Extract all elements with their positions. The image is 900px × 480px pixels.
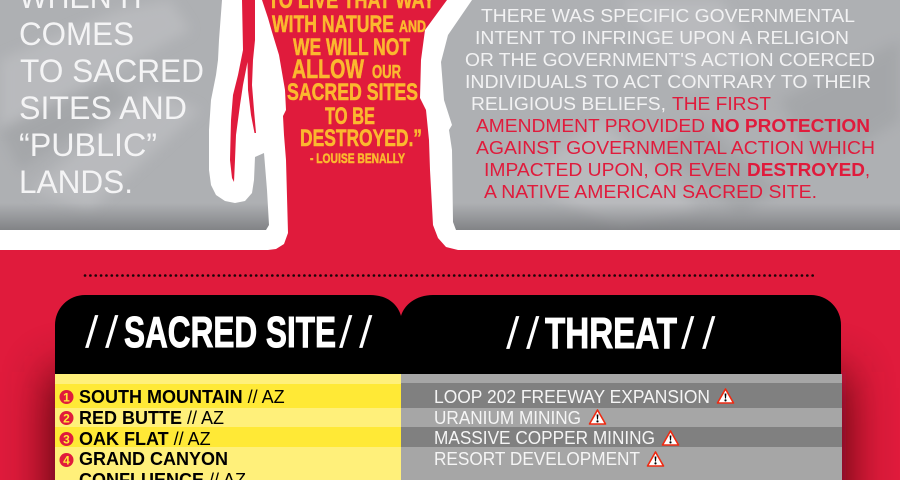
- heading: when it comes to sacred sites and public lands: “PUBLIC”: [19, 127, 157, 163]
- heading: threat: /: [679, 309, 696, 358]
- panel: gray background: [0, 0, 900, 230]
- header: black tabs: [55, 295, 841, 374]
- quote: Louise Benally: - LOUISE BENALLY: [310, 150, 405, 166]
- heading: threat: /: [700, 309, 717, 358]
- row 1 site: SOUTH MOUNTAIN // AZ: [79, 387, 285, 407]
- column: sacred site rows: [55, 374, 401, 480]
- heading: sacred site: /: [337, 308, 354, 357]
- quote: Louise Benally: WE WILL NOT: [293, 34, 410, 61]
- quote: Louise Benally: [268, 0, 435, 166]
- heading: when it comes to sacred sites and public lands: LANDS.: [19, 164, 133, 200]
- row 3 threat: MASSIVE COPPER MINING: [434, 428, 655, 448]
- heading: when it comes to sacred sites and public lands: COMES: [19, 16, 134, 52]
- heading: threat: /: [524, 309, 541, 358]
- text block: First Amendment explanation: NO PROTECTION: [711, 116, 870, 136]
- quote: Louise Benally: OUR: [372, 62, 401, 82]
- quote: Louise Benally: DESTROYED.”: [300, 125, 422, 152]
- text block: First Amendment explanation: THERE WAS SPECIFIC GOVERNMENTAL: [481, 6, 855, 26]
- heading: when it comes to sacred sites and public lands: [19, 0, 204, 200]
- row 1 site: 1: [63, 390, 70, 404]
- row 3 site: OAK FLAT // AZ: [79, 429, 211, 449]
- heading: sacred site: SACRED SITE: [124, 308, 336, 357]
- heading: threat: THREAT: [545, 309, 677, 358]
- row 4 site: 4: [63, 454, 70, 468]
- silhouette: white outline: [209, 0, 472, 250]
- row 4 site: GRAND CANYON: [79, 449, 228, 469]
- text block: First Amendment explanation: INDIVIDUALS TO ACT CONTRARY TO THEIR: [465, 72, 871, 92]
- text block: First Amendment explanation: THE FIRST: [672, 94, 771, 114]
- heading: sacred site: /: [357, 308, 374, 357]
- table: sacred sites and threats: [55, 295, 842, 480]
- text block: First Amendment explanation: ,: [865, 160, 870, 180]
- heading: sacred site: /: [103, 308, 120, 357]
- quote: Louise Benally: AND: [399, 17, 426, 36]
- silhouette: red figure: [262, 0, 458, 250]
- row 2 threat: URANIUM MINING: [434, 408, 581, 428]
- text block: First Amendment explanation: IMPACTED UPON, OR EVEN: [484, 160, 741, 180]
- panel: red lower background: [16, 340, 880, 480]
- white band: [0, 230, 900, 250]
- row 4 threat: RESORT DEVELOPMENT: [434, 449, 640, 469]
- text block: First Amendment explanation: INTENT TO INFRINGE UPON A RELIGION: [475, 28, 849, 48]
- quote: Louise Benally: SACRED SITES: [287, 79, 418, 106]
- quote: Louise Benally: TO BE: [325, 103, 375, 130]
- text block: First Amendment explanation: [465, 6, 875, 202]
- row 2 site: 2: [63, 412, 70, 426]
- column: threat rows: [401, 374, 842, 480]
- text block: First Amendment explanation: RELIGIOUS BELIEFS,: [471, 94, 666, 114]
- heading: sacred site: /: [83, 308, 100, 357]
- row 3 site: 3: [63, 432, 70, 446]
- heading: when it comes to sacred sites and public lands: SITES AND: [19, 90, 187, 126]
- text block: First Amendment explanation: AMENDMENT PROVIDED: [476, 116, 705, 136]
- row 4 site: [60, 449, 246, 480]
- heading: threat: /: [504, 309, 521, 358]
- row 1 threat: LOOP 202 FREEWAY EXPANSION: [434, 387, 710, 407]
- quote: Louise Benally: WITH NATURE: [272, 11, 394, 38]
- text block: First Amendment explanation: AGAINST GOVERNMENTAL ACTION WHICH: [476, 138, 875, 158]
- row 2 site: RED BUTTE // AZ: [79, 408, 224, 428]
- text block: First Amendment explanation: A NATIVE AMERICAN SACRED SITE.: [484, 182, 817, 202]
- text block: First Amendment explanation: DESTROYED: [747, 160, 865, 180]
- heading: when it comes to sacred sites and public lands: TO SACRED: [20, 53, 204, 89]
- icon: red feather strands: [230, 0, 256, 182]
- text block: First Amendment explanation: OR THE GOVERNMENT'S ACTION COERCED: [465, 50, 875, 70]
- quote: Louise Benally: ALLOW: [292, 54, 364, 84]
